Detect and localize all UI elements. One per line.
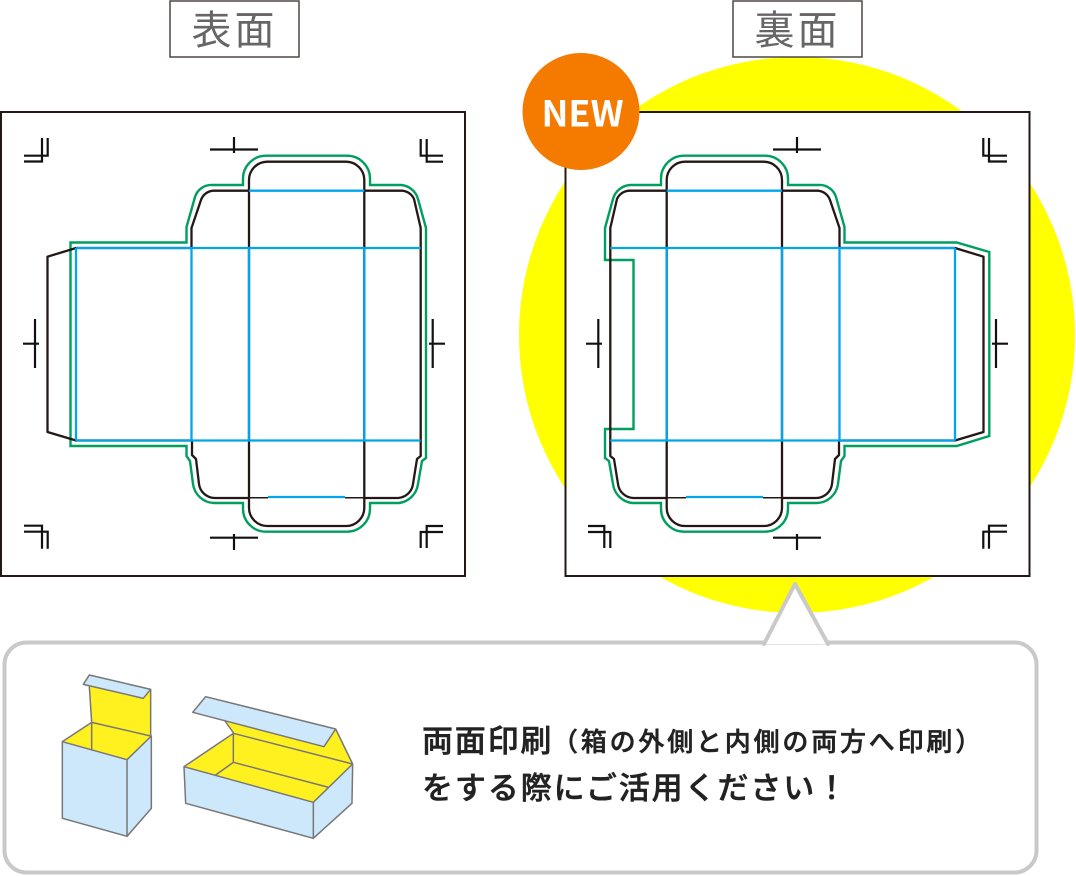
cut lines bbox=[610, 162, 984, 526]
callout text: をする際にご活用ください！ bbox=[422, 771, 849, 806]
fold lines bbox=[76, 191, 421, 497]
icon: tall open box bbox=[62, 675, 151, 836]
NEW badge: NEW bbox=[541, 86, 624, 138]
panel: front die-cut diagram bbox=[1, 112, 465, 576]
fold lines bbox=[610, 191, 955, 497]
icon: wide open box bbox=[184, 697, 353, 838]
label: front side: 表面 bbox=[192, 9, 278, 53]
callout text: （箱の外側と内側の両方へ印刷） bbox=[552, 727, 984, 757]
panel: back die-cut diagram bbox=[566, 112, 1030, 576]
crop marks bbox=[586, 137, 1008, 550]
yellow highlight circle bbox=[519, 57, 1075, 613]
label: back side: 裏面 bbox=[754, 9, 840, 53]
callout bbox=[4, 583, 1036, 872]
bleed outline with notch bbox=[605, 156, 989, 532]
label: front side bbox=[170, 1, 299, 57]
callout text: 両面印刷 bbox=[422, 724, 553, 759]
label: back side bbox=[733, 1, 862, 57]
NEW badge bbox=[522, 53, 640, 170]
cut lines bbox=[48, 162, 421, 526]
bleed outline bbox=[70, 156, 426, 532]
crop marks bbox=[23, 137, 445, 550]
callout pointer bbox=[764, 583, 828, 644]
